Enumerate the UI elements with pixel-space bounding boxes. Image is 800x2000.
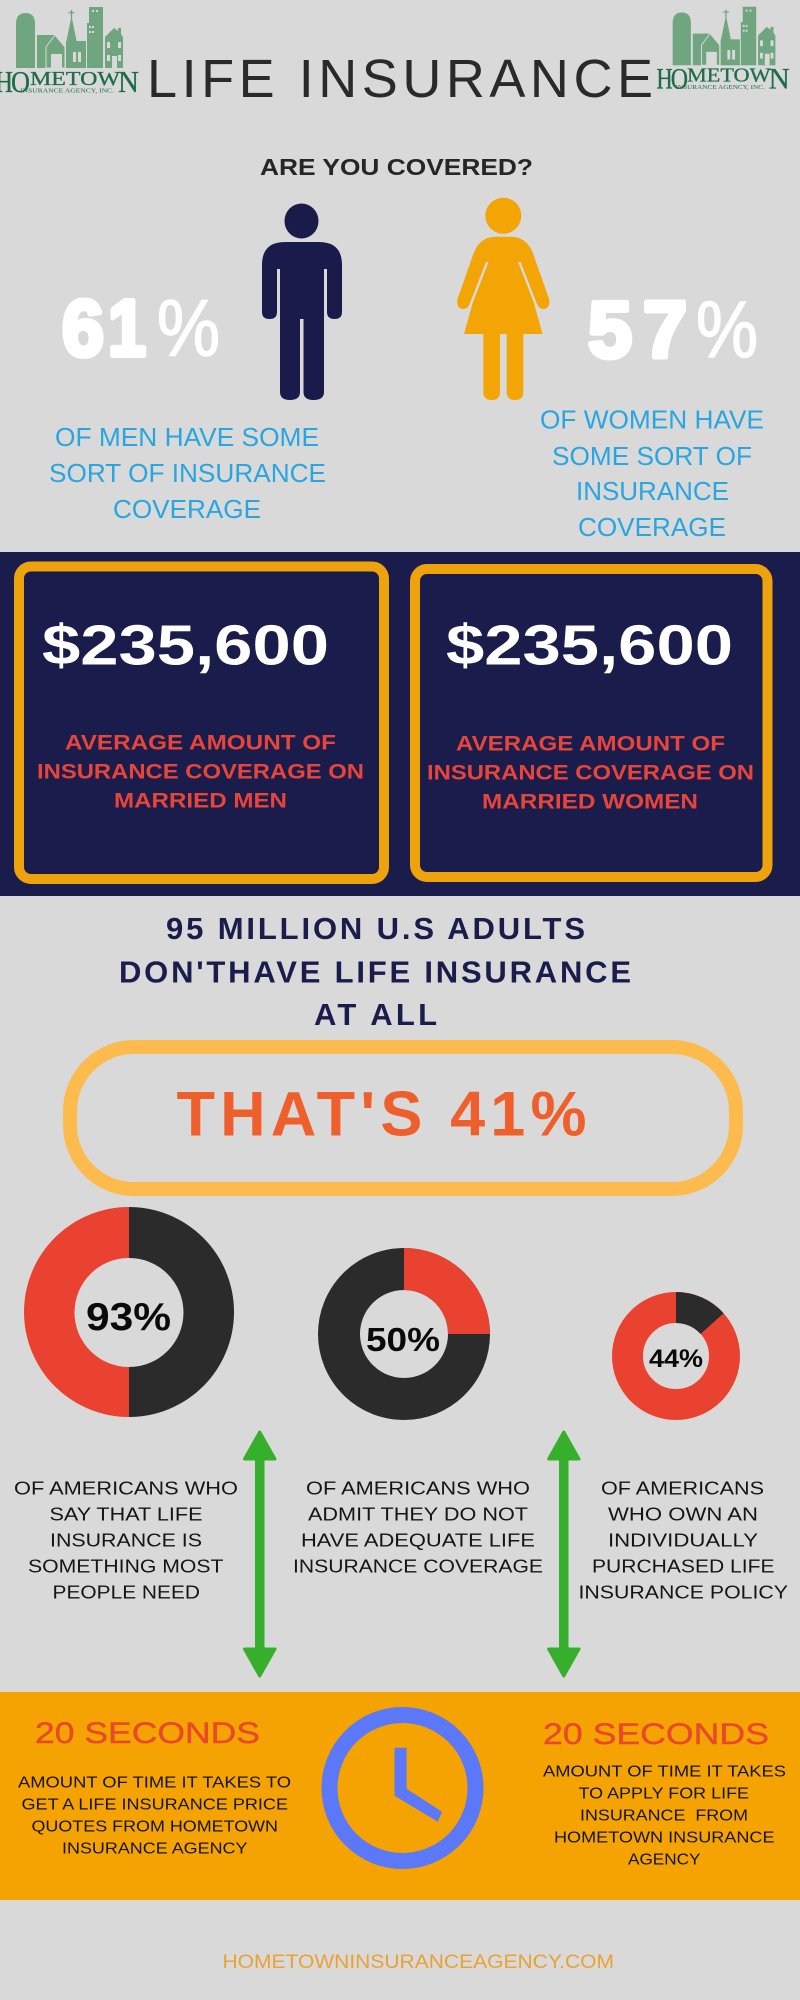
stat: 57%: % [696,285,758,374]
stat: 61%: 1 [108,284,146,372]
text: application time: INSURANCE FROM [580,1808,748,1825]
description: INSURANCE COVERAGE ON [37,760,364,784]
description: AVERAGE AMOUNT OF [65,731,336,755]
callout text: THAT'S 41% [176,1080,586,1150]
chart: donut 93% [24,1207,234,1417]
heading: 20 seconds left: 20 SECONDS [35,1717,260,1750]
text: price quote time: AMOUNT OF TIME IT TAKES TO [18,1775,291,1792]
text: 44% description: WHO OWN AN [608,1504,758,1525]
text: men coverage [49,422,326,524]
panel: orange time band [0,1692,800,1900]
text: women coverage: SOME SORT OF [552,441,752,471]
text: application time [543,1764,786,1869]
text: 44% description: OF AMERICANS [601,1477,764,1498]
text: women coverage: OF WOMEN HAVE [540,404,764,434]
text: 44% description [578,1477,788,1603]
icon: clock [330,1715,476,1861]
text: 50% description: ADMIT THEY DO NOT [308,1504,528,1525]
description [37,731,364,813]
logo buildings [673,7,775,65]
text: application time: TO APPLY FOR LIFE [578,1786,749,1803]
heading: 20 seconds right: 20 SECONDS [543,1718,769,1751]
text: women coverage [540,404,764,542]
text: 93% description: PEOPLE NEED [52,1582,200,1603]
logo wordmark: H [656,62,673,95]
text: 50% description: OF AMERICANS WHO [306,1477,530,1498]
text: 44% description: PURCHASED LIFE [592,1556,774,1577]
value: 50% [366,1321,440,1358]
value: 44% [649,1345,703,1373]
text: women coverage: INSURANCE [576,476,729,506]
text: 50% description [293,1477,543,1577]
text: 93% description: INSURANCE IS [50,1530,202,1551]
text: application time: AMOUNT OF TIME IT TAKES [543,1764,786,1781]
icon: man [262,204,342,400]
stat: 57%: 5 [588,285,632,374]
text: 93% description: SAY THAT LIFE [50,1504,202,1525]
logo wordmark: O [671,62,688,95]
text: 50% description: INSURANCE COVERAGE [293,1556,543,1577]
logo wordmark: METOW [30,68,121,90]
callout: that's 41% [70,1047,736,1189]
subtitle: ARE YOU COVERED? [260,154,533,180]
panel: navy coverage band [0,552,800,896]
description [427,731,754,814]
text: women coverage: COVERAGE [578,512,726,542]
panel: married women box [415,569,768,877]
stat: 61%: % [157,284,220,372]
logo buildings [16,7,123,68]
amount: $235,600 [446,614,733,678]
text: 50% description: HAVE ADEQUATE LIFE [301,1530,535,1551]
panel: married men box [19,566,384,879]
arrow: double-headed green right [549,1432,579,1676]
text: men coverage: OF MEN HAVE SOME [55,422,319,452]
logo details [51,10,121,68]
arrow: double-headed green left [244,1432,275,1676]
logo subline: INSURANCE AGENCY, INC. [20,88,114,94]
footer: website: HOMETOWNINSURANCEAGENCY.COM [222,1952,614,1973]
stat: 61%: 6 [62,284,104,372]
chart: donut 50% [339,1248,490,1399]
logo wordmark: N [118,64,139,99]
chart: donut 44% [628,1292,724,1404]
text: 93% description: OF AMERICANS WHO [14,1477,238,1498]
logo wordmark: N [769,62,790,95]
logo details [706,10,773,65]
logo subline: INSURANCE AGENCY, INC. [676,84,765,91]
logo wordmark: METOW [687,65,771,87]
heading: 95 million adults [119,911,631,1032]
text: 44% description: INDIVIDUALLY [608,1530,758,1551]
description: AVERAGE AMOUNT OF [456,731,725,755]
heading: 95 million adults: 95 MILLION U.S ADULTS [166,911,585,946]
text: 93% description [14,1477,238,1603]
text: price quote time: INSURANCE AGENCY [62,1841,248,1858]
amount: $235,600 [42,614,329,678]
value: 93% [86,1296,171,1339]
text: 44% description: INSURANCE POLICY [578,1582,788,1603]
stat: 57%: 7 [643,285,687,374]
description: MARRIED MEN [114,789,287,813]
logo: Hometown Insurance Agency right [656,7,790,95]
text: application time: AGENCY [628,1852,701,1869]
description: INSURANCE COVERAGE ON [427,760,754,784]
logo wordmark: O [11,64,30,99]
text: price quote time [18,1775,291,1858]
heading: 95 million adults: DON'THAVE LIFE INSURANCE [119,954,631,990]
text: price quote time: GET A LIFE INSURANCE PRICE [22,1797,288,1814]
description: MARRIED WOMEN [482,790,698,814]
text: men coverage: COVERAGE [113,494,261,524]
text: men coverage: SORT OF INSURANCE [49,458,326,488]
icon: woman [457,198,549,400]
text: application time: HOMETOWN INSURANCE [554,1830,774,1847]
text: price quote time: QUOTES FROM HOMETOWN [32,1819,278,1836]
heading: 95 million adults: AT ALL [314,997,437,1032]
text: 93% description: SOMETHING MOST [28,1556,224,1577]
title: LIFE INSURANCE [147,49,653,109]
logo: Hometown Insurance Agency left [0,7,139,99]
